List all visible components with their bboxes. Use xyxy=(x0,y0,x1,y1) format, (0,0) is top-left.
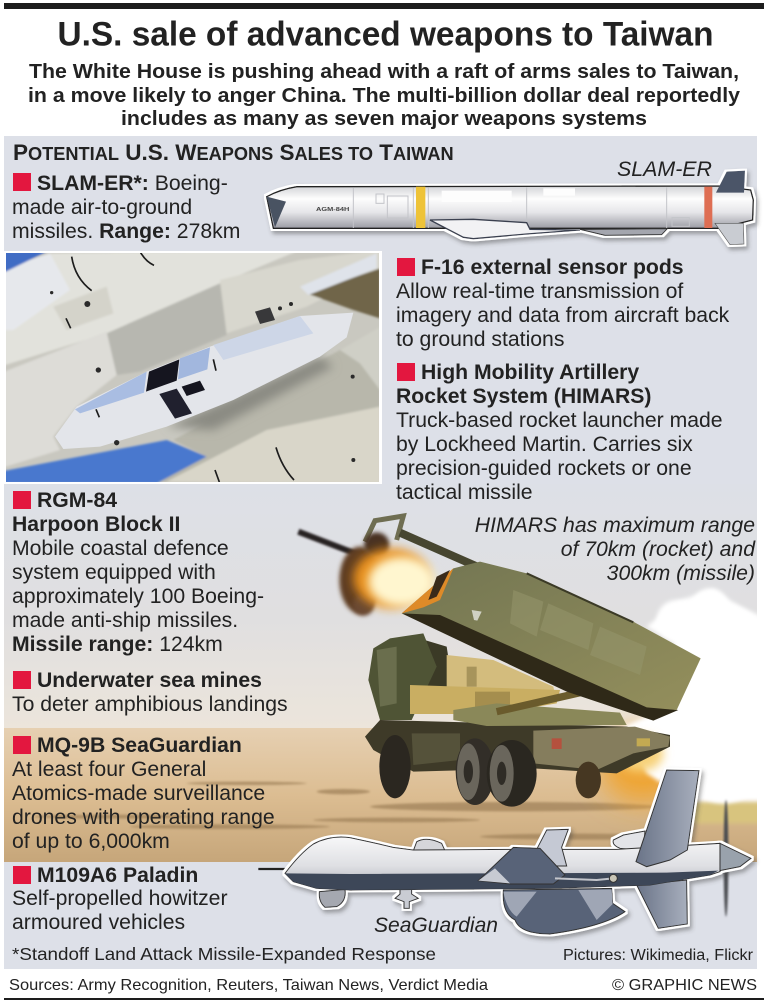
panel lines xyxy=(353,187,689,228)
callout: HIMARS range xyxy=(475,514,756,585)
probe xyxy=(258,865,292,872)
item: M109A6 Paladin xyxy=(12,864,228,934)
item: F-16 pods: imagery and data from aircraft back xyxy=(396,304,730,327)
wing xyxy=(430,219,580,239)
lower wing xyxy=(157,327,380,482)
item: MQ-9B SeaGuardian: drones with operating range xyxy=(12,806,275,829)
item: MQ-9B SeaGuardian: At least four General xyxy=(12,758,206,781)
mid body xyxy=(412,733,460,765)
item: RGM-84 Harpoon: Mobile coastal defence xyxy=(12,537,229,560)
launch pod underside xyxy=(402,613,678,721)
item: RGM-84 Harpoon: system equipped with xyxy=(12,561,216,584)
item: MQ-9B SeaGuardian: MQ-9B SeaGuardian xyxy=(37,734,242,757)
copyright: © GRAPHIC NEWS xyxy=(612,977,757,994)
item: MQ-9B SeaGuardian: Atomics-made surveillance xyxy=(12,782,265,805)
callout: HIMARS range: 300km (missile) xyxy=(607,562,755,585)
belly xyxy=(285,871,718,890)
smoke and fireball xyxy=(339,532,435,616)
wing xyxy=(478,847,565,884)
bands xyxy=(416,187,425,228)
truck cab xyxy=(368,633,437,720)
sources: Sources: Army Recognition, Reuters, Taiwan News, Verdict Media xyxy=(9,977,488,994)
launcher frame xyxy=(365,516,403,542)
item: F-16 pods: Allow real-time transmission of xyxy=(396,280,683,303)
nose camera ball xyxy=(319,889,345,907)
sky lower xyxy=(0,440,207,483)
title: U.S. sale of advanced weapons to Taiwan xyxy=(58,16,714,54)
desert ground xyxy=(4,728,757,862)
upper left missile xyxy=(0,250,300,367)
rocket exhaust cloud xyxy=(623,588,768,803)
lower fin xyxy=(715,223,744,245)
item: RGM-84 Harpoon: Harpoon Block II xyxy=(12,513,180,536)
chassis xyxy=(453,703,627,726)
yellow glow over blast front xyxy=(617,735,663,772)
sky xyxy=(4,484,757,729)
item: SLAM-ER: missiles. Range: 278km xyxy=(12,220,240,243)
item: RGM-84 Harpoon: approximately 100 Boeing- xyxy=(12,585,264,608)
item: RGM-84 Harpoon: RGM-84 xyxy=(37,489,117,512)
callout: HIMARS range: of 70km (rocket) and xyxy=(561,538,756,561)
launch pod box xyxy=(402,562,701,710)
item: HIMARS: by Lockheed Martin. Carries six xyxy=(396,433,693,456)
winglet xyxy=(537,829,568,866)
photo: HIMARS rocket launcher firing in the desert xyxy=(4,484,768,862)
item: HIMARS: precision-guided rockets or one xyxy=(396,457,692,480)
pod shadow xyxy=(167,357,333,430)
item: F-16 pods xyxy=(396,256,730,351)
item: SLAM-ER: SLAM-ER*: Boeing- xyxy=(37,172,228,195)
bottom rule xyxy=(4,998,764,1000)
item: RGM-84 Harpoon: Missile range: 124km xyxy=(12,633,223,656)
intro text xyxy=(28,60,741,130)
label: SeaGuardian: SeaGuardian xyxy=(374,914,498,937)
ground shading xyxy=(33,782,680,840)
lower tail fin xyxy=(637,880,687,928)
dome xyxy=(413,839,445,851)
callout: HIMARS range: HIMARS has maximum range xyxy=(475,514,755,537)
item: sea mines: Underwater sea mines xyxy=(37,669,262,692)
truck rear deck xyxy=(447,655,557,703)
intro text: in a move likely to anger China. The multi-billion dollar deal reportedly xyxy=(28,84,741,107)
item: sea mines: To deter amphibious landings xyxy=(12,693,288,716)
label: SLAM-ER: SLAM-ER xyxy=(617,158,712,181)
missile body xyxy=(267,186,753,228)
rocket in flight xyxy=(298,532,357,554)
item: MQ-9B SeaGuardian xyxy=(12,734,275,853)
antenna xyxy=(395,888,418,908)
pod top edge xyxy=(527,573,633,622)
top rule xyxy=(4,3,764,9)
item: MQ-9B SeaGuardian: of up to 6,000km xyxy=(12,830,170,853)
belly duct xyxy=(580,229,667,235)
intro text: The White House is pushing ahead with a raft of arms sales to Taiwan, xyxy=(29,60,739,83)
rear equipment xyxy=(533,727,670,770)
sky corner xyxy=(0,250,50,272)
lower chassis dark xyxy=(365,720,670,773)
intro text: includes as many as seven major weapons systems xyxy=(121,107,647,130)
camera xyxy=(159,389,192,419)
landing gear line xyxy=(555,878,613,880)
item: M109A6 Paladin: Self-propelled howitzer xyxy=(12,887,228,910)
item: F-16 pods: F-16 external sensor pods xyxy=(421,256,684,279)
wheels xyxy=(379,735,601,807)
footnote: *Standoff Land Attack Missile-Expanded Response xyxy=(12,944,436,964)
lower right tube xyxy=(167,407,380,483)
item: SLAM-ER xyxy=(12,172,240,243)
photo: F-16 external sensor pod xyxy=(0,250,400,490)
upper fin xyxy=(716,171,745,193)
window xyxy=(146,359,179,392)
dark mass behind cab xyxy=(413,637,453,703)
hydraulic strut xyxy=(497,690,592,712)
propeller xyxy=(724,800,728,917)
external pod xyxy=(503,888,625,934)
item: SLAM-ER: made air-to-ground xyxy=(12,196,192,219)
item: HIMARS: Rocket System (HIMARS) xyxy=(396,385,651,408)
pod xyxy=(55,313,353,449)
dark corner xyxy=(307,268,380,318)
intake xyxy=(613,831,645,851)
fuselage xyxy=(285,837,720,890)
tail cone xyxy=(720,843,751,871)
firing glow xyxy=(600,730,687,803)
marking: AGM-84H xyxy=(316,207,349,213)
item: HIMARS xyxy=(396,361,723,504)
item: RGM-84 Harpoon xyxy=(12,489,264,656)
item: HIMARS: Truck-based rocket launcher made xyxy=(396,409,723,432)
item: M109A6 Paladin: armoured vehicles xyxy=(12,911,185,934)
item: sea mines xyxy=(12,669,288,716)
surface arcs and marks xyxy=(66,253,294,482)
right upper tube xyxy=(220,250,380,333)
pod orange front face xyxy=(402,568,453,613)
item: HIMARS: tactical missile xyxy=(396,481,533,504)
upper tail fin xyxy=(636,770,699,867)
nose cone xyxy=(267,197,286,227)
pod panels xyxy=(510,590,647,675)
yellow storage box xyxy=(410,685,560,714)
item: F-16 pods: to ground stations xyxy=(396,328,564,351)
pod highlights xyxy=(503,889,613,920)
item: M109A6 Paladin: M109A6 Paladin xyxy=(37,864,198,887)
illustration: SeaGuardian drone xyxy=(258,770,751,934)
heading: potential sales: POTENTIAL U.S. WEAPONS SALES TO TAIWAN xyxy=(13,140,454,165)
middle body xyxy=(107,283,227,375)
item: HIMARS: High Mobility Artillery xyxy=(421,361,639,384)
item: RGM-84 Harpoon: made anti-ship missiles. xyxy=(12,609,238,632)
illustration: SLAM-ER missile xyxy=(267,171,753,245)
picture credit: Pictures: Wikimedia, Flickr xyxy=(563,947,753,964)
